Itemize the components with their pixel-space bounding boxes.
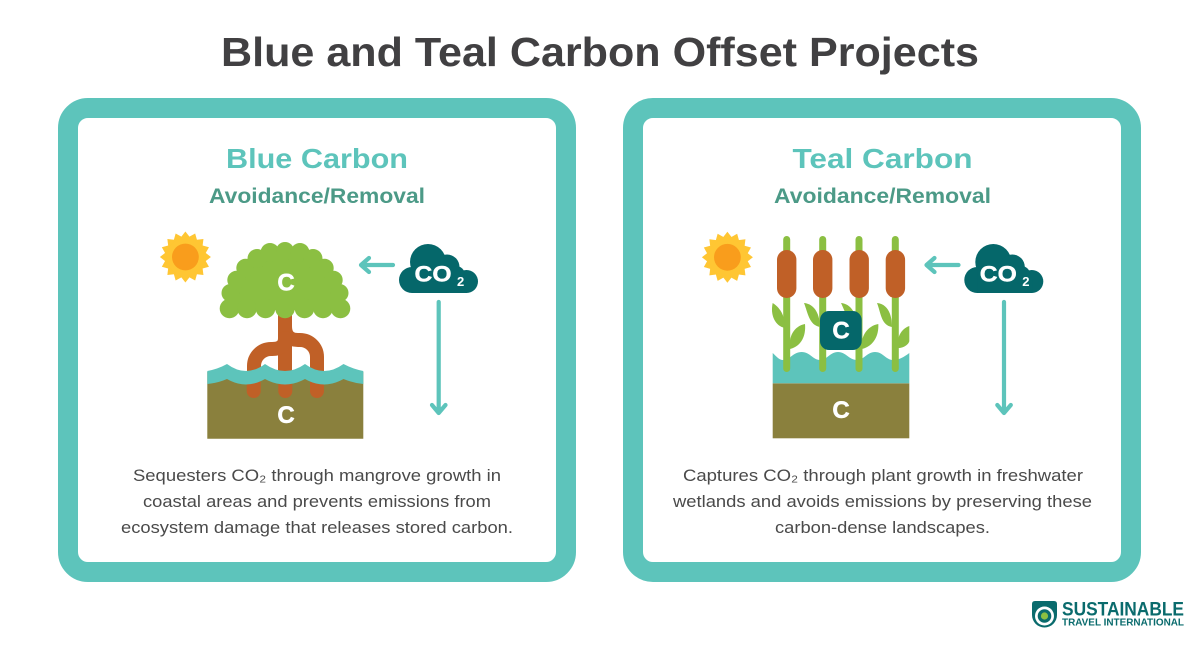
root tips below water [247, 375, 324, 398]
heading: teal carbon: Teal Carbon [792, 143, 972, 174]
description: blue carbon: coastal areas and prevents emissions from [143, 492, 491, 511]
cattail heads [777, 250, 905, 298]
subheading: avoidance/removal: Avoidance/Removal [774, 185, 991, 208]
icon: sun [160, 231, 211, 283]
panel frame: blue carbon [68, 108, 566, 572]
leaves [772, 303, 909, 349]
description: blue carbon: Sequesters CO₂ through mangrove growth in [133, 466, 501, 485]
panel: teal carbon [633, 108, 1131, 572]
soil [207, 372, 363, 439]
subheading: avoidance/removal: Avoidance/Removal [209, 185, 425, 208]
mangrove canopy [220, 242, 350, 318]
plant carbon label [820, 311, 862, 350]
canopy carbon label: C [277, 270, 295, 296]
icon: mangrove tree [207, 242, 363, 439]
logo: Sustainable Travel International [1032, 598, 1184, 628]
icon: CO2 cloud: CO [980, 262, 1017, 286]
water band [207, 364, 363, 384]
soil carbon label: C [277, 402, 295, 429]
icon: sun [702, 232, 753, 283]
panel frame: teal carbon [633, 108, 1131, 572]
arrow: CO2 to tree [361, 258, 393, 272]
panel: blue carbon [68, 108, 566, 572]
water [773, 352, 909, 383]
logo tagline: TRAVEL INTERNATIONAL [1062, 618, 1184, 628]
description: teal carbon [672, 466, 1092, 537]
soil carbon label: C [832, 397, 850, 424]
plant carbon label: C [832, 318, 850, 344]
stems [783, 236, 899, 372]
heading: blue carbon: Blue Carbon [226, 143, 408, 174]
icon: CO2 cloud [964, 244, 1043, 293]
icon: CO2 cloud: 2 [1022, 274, 1030, 289]
icon: CO2 cloud [399, 244, 478, 293]
arrow: CO2 to plants [926, 258, 958, 272]
description: blue carbon [121, 466, 513, 537]
mangrove trunk and roots [254, 315, 317, 392]
title: Blue and Teal Carbon Offset Projects [221, 29, 979, 75]
arrow: CO2 to soil [432, 302, 446, 413]
icon: CO2 cloud: CO [414, 262, 452, 286]
logo icon [1032, 601, 1057, 628]
soil [773, 383, 909, 438]
logo wordmark: SUSTAINABLE [1062, 598, 1184, 620]
icon: CO2 cloud: 2 [457, 274, 464, 289]
description: teal carbon: Captures CO₂ through plant growth in freshwater [683, 466, 1083, 485]
arrow: CO2 to soil [997, 302, 1011, 413]
description: blue carbon: ecosystem damage that releases stored carbon. [121, 518, 513, 537]
description: teal carbon: wetlands and avoids emissions by preserving these [672, 492, 1092, 511]
icon: cattail wetland [772, 236, 909, 438]
description: teal carbon: carbon-dense landscapes. [775, 518, 990, 537]
